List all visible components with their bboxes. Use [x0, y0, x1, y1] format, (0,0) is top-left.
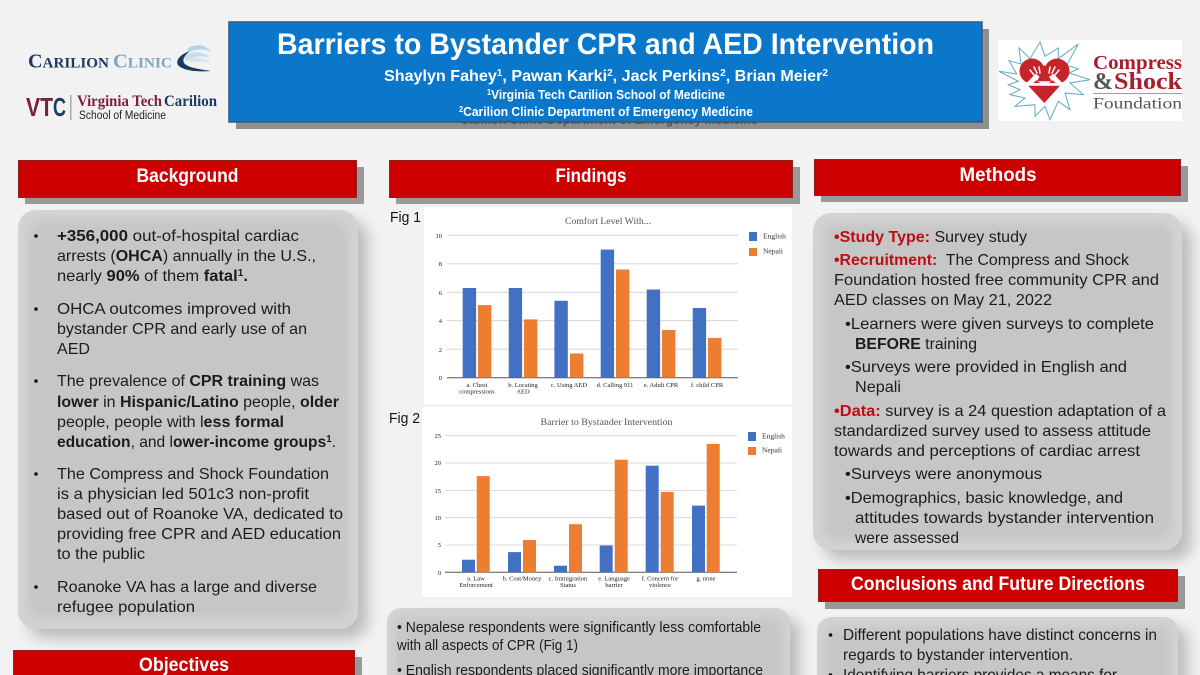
legend: Nepali	[763, 246, 783, 256]
chart: barriers: 15	[434, 488, 441, 495]
item: recruitment: BEFORE training	[855, 336, 977, 353]
chart: barriers: 20	[434, 460, 441, 467]
logo: Virginia Tech Carilion School of Medicine: Virginia Tech	[77, 93, 162, 110]
item: data: towards and perceptions of cardiac arrest	[834, 443, 1141, 460]
x-axis labels: e. Language	[598, 576, 630, 582]
chart: comfort level: 0	[439, 375, 442, 382]
item: recruitment: •Surveys were provided in English and	[845, 359, 1127, 376]
x-axis labels: f. child CPR	[691, 382, 724, 389]
affiliation 1: 1	[487, 88, 492, 97]
bullet: prevalence	[34, 373, 339, 451]
item: data: attitudes towards bystander intervention	[855, 510, 1154, 527]
item: data: •Surveys were anonymous	[845, 466, 1042, 483]
bars: Nepali	[477, 444, 720, 572]
x-axis labels: a. Chest	[467, 382, 488, 389]
header: Background	[18, 160, 364, 204]
bullet: outcomes: OHCA outcomes improved with	[57, 301, 291, 318]
bullet: foundation: The Compress and Shock Foundation	[57, 466, 329, 483]
chart: comfort level: Comfort Level With...	[565, 216, 651, 227]
x-axis labels: compressions	[459, 388, 495, 396]
authors: , Jack Perkins	[613, 68, 720, 85]
logo: Carilion Clinic: CARILION	[28, 50, 109, 72]
logo: Carilion Clinic: CLINIC	[113, 50, 172, 72]
x-axis labels: b. Locating	[508, 382, 539, 389]
panel: conclusions: regards to bystander intervention.	[843, 647, 1073, 664]
x-axis labels: g. none	[696, 576, 716, 582]
panel: findings text	[387, 608, 800, 675]
chart: comfort level: 2	[439, 347, 442, 354]
bullet: cardiac arrests: nearly 90% of them fatal	[57, 268, 237, 285]
bullet: foundation	[34, 466, 343, 563]
header: Methods	[814, 160, 1188, 202]
title banner	[229, 22, 989, 129]
bullet: cardiac arrests: arrests (OHCA) annually in the U.S.,	[57, 248, 316, 265]
item: data: •Demographics, basic knowledge, and	[845, 490, 1123, 507]
panel: background	[18, 210, 368, 639]
authors: 2	[822, 68, 828, 79]
legend: English	[762, 432, 785, 440]
header: Conclusions and Future Directions: Conclusions and Future Directions	[851, 574, 1145, 595]
x-axis labels: barrier	[605, 582, 623, 589]
header: Background: Background	[136, 166, 238, 187]
bullet: cardiac arrests	[34, 228, 316, 285]
item: data: •Data: survey is a 24 question adaptation of a	[834, 403, 1166, 420]
logo: Virginia Tech Carilion School of Medicine: School of Medicine	[79, 110, 166, 122]
item: recruitment: AED classes on May 21, 2022	[834, 292, 1052, 309]
authors: 1	[497, 68, 503, 79]
chart: barriers	[422, 407, 792, 597]
bullet: prevalence: The prevalence of CPR training was	[57, 373, 319, 390]
authors: , Pawan Karki	[502, 68, 607, 85]
item: recruitment: Foundation hosted free community CPR and	[834, 272, 1159, 289]
bullet: cardiac arrests: +356,000 out-of-hospital cardiac	[57, 228, 299, 245]
x-axis labels: violence	[649, 582, 671, 589]
x-axis labels: f. Concern for	[642, 576, 679, 582]
authors: 2	[607, 68, 613, 79]
legend: Nepali	[762, 446, 782, 454]
bullet: foundation: is a physician led 501c3 non-profit	[57, 486, 310, 503]
bars: English	[463, 250, 706, 378]
logo: Compress and Shock Foundation: Foundation	[1093, 96, 1182, 112]
chart: comfort level: 8	[439, 261, 442, 268]
x-axis labels: d. Calling 911	[597, 382, 633, 389]
header: Findings	[390, 160, 800, 204]
item: recruitment	[834, 252, 1159, 396]
affiliation 2: Carilion Clinic Department of Emergency Medicine	[463, 104, 753, 119]
title banner: Carilion Clinic Department of Emergency Medicine	[460, 112, 758, 127]
x-axis labels: b. Cost/Money	[503, 576, 542, 582]
logo: Virginia Tech Carilion School of Medicine: C	[53, 92, 66, 122]
chart: barriers: 0	[438, 570, 441, 577]
chart: comfort level: 4	[439, 318, 443, 325]
item: recruitment: Nepali	[855, 379, 901, 396]
panel: findings text: with all aspects of CPR (Fig 1)	[396, 638, 578, 654]
x-axis labels: Status	[560, 582, 576, 589]
bars: Nepali	[478, 270, 721, 378]
bullet: foundation: to the public	[57, 546, 145, 563]
item: data: were assessed	[854, 530, 959, 547]
label: Fig 2: Fig 2	[389, 410, 420, 427]
bullet: prevalence: lower in Hispanic/Latino people, older	[57, 394, 339, 411]
chart: comfort level	[424, 207, 792, 404]
x-axis labels: AED	[516, 388, 530, 396]
bullet: refugee population	[34, 579, 317, 616]
affiliation 1: Virginia Tech Carilion School of Medicine	[491, 87, 725, 102]
logo: Compress and Shock Foundation: Shock	[1114, 69, 1183, 95]
x-axis labels: a. Law	[467, 576, 485, 582]
x-axis labels	[459, 576, 716, 589]
bullet: foundation: providing free CPR and AED education	[57, 526, 341, 543]
logo: Virginia Tech Carilion School of Medicine: Carilion	[164, 93, 217, 110]
chart: barriers: 5	[438, 542, 441, 549]
bullet: refugee population: refugee population	[57, 599, 195, 616]
bullet: refugee population: Roanoke VA has a large and diverse	[57, 579, 317, 596]
authors: Shaylyn Fahey	[384, 68, 496, 85]
bullet: prevalence: education, and lower-income groups	[57, 434, 330, 451]
item: data: standardized survey used to assess attitude	[834, 423, 1151, 440]
chart: comfort level: 10	[436, 233, 442, 240]
header: Objectives	[14, 650, 362, 675]
affiliation 2: 2	[459, 105, 464, 114]
item: recruitment: •Learners were given surveys to complete	[845, 316, 1154, 333]
logo: Carilion Clinic	[28, 45, 211, 72]
bullet: cardiac arrests: 1	[238, 268, 244, 279]
header: Findings: Findings	[556, 166, 626, 187]
chart: barriers: 10	[434, 515, 441, 522]
bullet: prevalence: people, people with less formal	[57, 414, 284, 431]
panel: conclusions: Different populations have distinct concerns in	[843, 627, 1157, 644]
header: Conclusions and Future Directions	[818, 570, 1185, 609]
chart: barriers: 25	[434, 433, 441, 440]
bullet: outcomes	[34, 301, 307, 358]
logo: Virginia Tech Carilion School of Medicine	[26, 92, 217, 122]
legend	[749, 232, 786, 256]
bullet: cardiac arrests: .	[243, 268, 248, 285]
header: Methods: Methods	[960, 165, 1036, 186]
x-axis labels	[459, 382, 724, 396]
label: Fig 1: Fig 1	[390, 209, 421, 226]
logo: Compress and Shock Foundation: Compress	[1093, 52, 1182, 74]
x-axis labels: e. Adult CPR	[644, 382, 679, 389]
chart: barriers: Barrier to Bystander Intervention	[540, 418, 673, 428]
x-axis labels: Enforcement	[459, 582, 493, 589]
legend	[748, 432, 785, 455]
chart: comfort level: 6	[439, 290, 443, 297]
item: recruitment: •Recruitment: The Compress and Shock	[834, 252, 1130, 269]
panel: methods	[813, 213, 1192, 560]
item: data	[834, 403, 1166, 547]
panel: conclusions	[817, 617, 1188, 675]
item: study type: •Study Type: Survey study	[834, 229, 1027, 246]
authors: 2	[720, 68, 726, 79]
bars: English	[462, 466, 705, 572]
logo: Compress and Shock Foundation	[998, 40, 1183, 121]
logo: Virginia Tech Carilion School of Medicine: VT	[26, 92, 53, 122]
bullet: foundation: based out of Roanoke VA, dedicated to	[57, 506, 343, 523]
x-axis labels: c. Using AED	[551, 382, 587, 389]
legend: English	[763, 232, 786, 240]
panel: findings text: • Nepalese respondents were significantly less comfortable	[397, 620, 761, 636]
bullet: outcomes: AED	[57, 341, 90, 358]
bullet: prevalence: 1	[326, 434, 332, 445]
title: Barriers to Bystander CPR and AED Intervention	[277, 28, 934, 61]
bullet: prevalence: .	[332, 434, 336, 451]
authors: , Brian Meier	[726, 68, 822, 85]
logo: Compress and Shock Foundation: &	[1093, 69, 1113, 95]
bullet: outcomes: bystander CPR and early use of an	[57, 321, 307, 338]
x-axis labels: c. Immigration	[549, 576, 588, 582]
